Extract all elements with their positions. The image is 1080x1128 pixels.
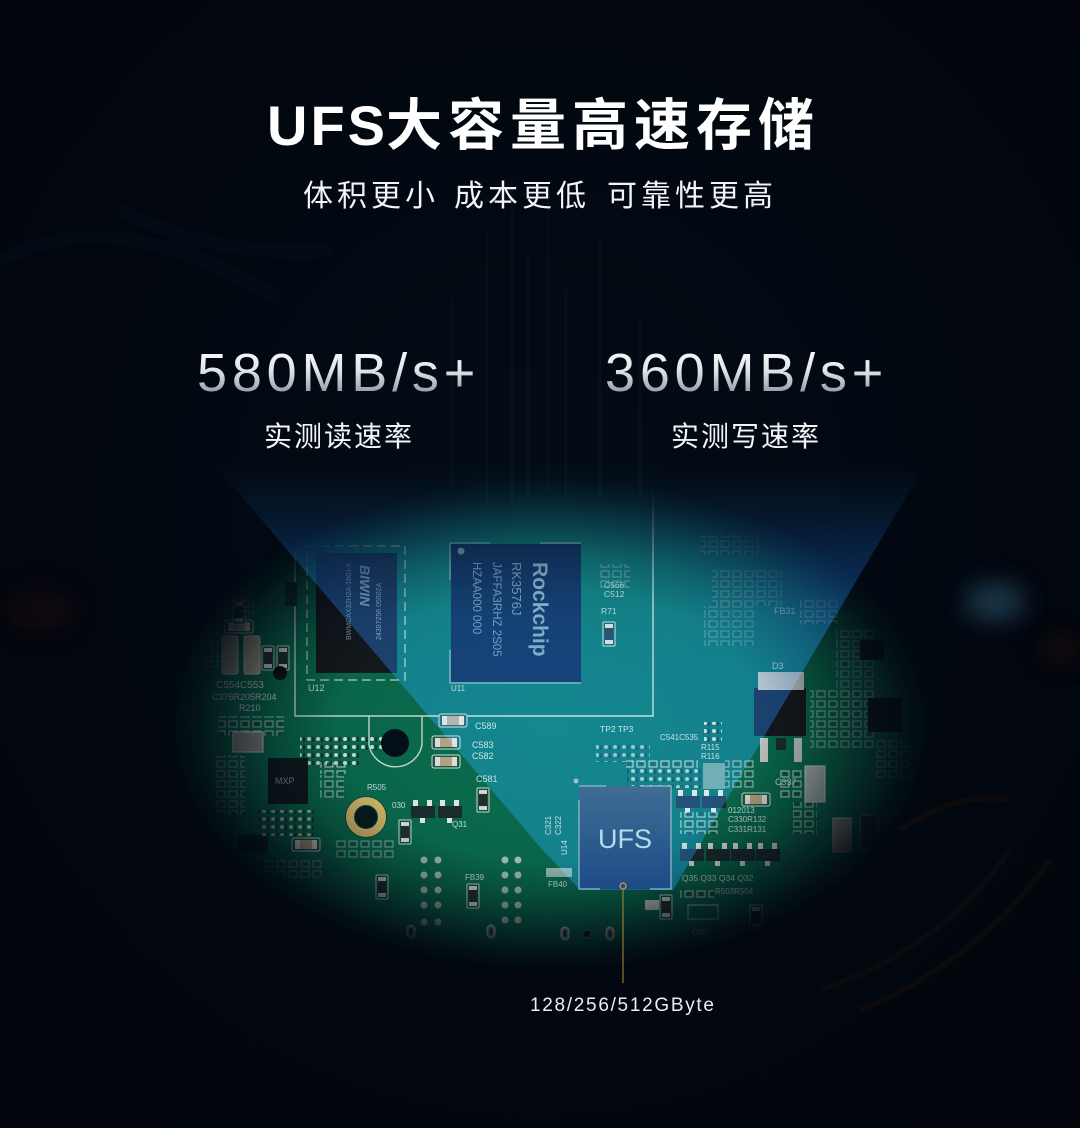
metric: read speed: 实测读速率 xyxy=(264,421,414,452)
regulator D3 xyxy=(754,672,806,762)
memory chip U12: U12 xyxy=(308,683,325,693)
circuit board photograph xyxy=(188,494,912,958)
metric: read speed: 580MB/s+ xyxy=(197,343,480,403)
left board components: C554C553 xyxy=(216,680,264,691)
lower board components: C321 xyxy=(544,815,553,835)
lower board components: U14 xyxy=(560,840,569,855)
main processor: JAFFA3RHZ 2S05 xyxy=(490,562,502,657)
lower board components xyxy=(367,783,614,940)
right board components: C330R132 xyxy=(728,815,767,824)
lower board components: 030 xyxy=(392,801,406,810)
memory chip U12 xyxy=(307,546,405,693)
blue light beam overlay xyxy=(215,465,925,890)
main processor: HZAA000 000 xyxy=(470,562,482,634)
upper components: C566 xyxy=(604,580,625,590)
lower board components: FB40 xyxy=(548,880,568,889)
capacitors C589 C583 C582: C589 xyxy=(475,721,497,731)
memory chip U12: BWMCAX32H2A-16GI-X xyxy=(346,562,353,640)
metric: read speed xyxy=(197,343,480,452)
callout: capacity: 128/256/512GByte xyxy=(530,995,716,1016)
right board components: R116 xyxy=(701,752,720,761)
gold ring mounting hole xyxy=(345,796,387,838)
right board components: Q29 xyxy=(692,928,708,937)
metric: write speed: 实测写速率 xyxy=(671,421,821,452)
infographic canvas xyxy=(13,96,1072,1015)
title: UFS xyxy=(267,94,388,157)
right board components: C331R131 xyxy=(728,825,767,834)
lower board components: C322 xyxy=(554,815,563,835)
UFS chip: UFS xyxy=(598,824,652,854)
capacitors C589 C583 C582: C582 xyxy=(472,751,494,761)
left board components: C376R205R204 xyxy=(212,692,277,702)
subtitle: 体积更小 xyxy=(303,180,439,213)
upper components: D3 xyxy=(772,661,784,671)
right board components: Q35 Q33 Q34 Q32 xyxy=(682,873,754,883)
lower board components: FB39 xyxy=(465,873,485,882)
main processor: Rockchip xyxy=(528,562,551,657)
metric: write speed xyxy=(605,343,888,452)
right board components xyxy=(596,628,911,942)
subtitle: 成本更低 xyxy=(454,180,590,213)
right board components: 012013 xyxy=(728,806,755,815)
upper components: C512 xyxy=(604,589,625,599)
capacitors C589 C583 C582: C583 xyxy=(472,740,494,750)
subtitle: 可靠性更高 xyxy=(607,180,777,213)
upper components: FB31 xyxy=(774,606,796,616)
main processor: RK3576J xyxy=(509,562,524,615)
silk outline around processor xyxy=(295,480,653,716)
left board components: R210 xyxy=(239,703,261,713)
UFS chip xyxy=(574,778,671,889)
lower board components: Q31 xyxy=(452,820,468,829)
memory chip U12: BIWIN xyxy=(357,565,373,607)
main processor: U11 xyxy=(451,684,466,693)
main processor xyxy=(450,543,581,693)
upper components: R71 xyxy=(601,606,617,616)
callout line and marker xyxy=(620,883,626,983)
right board components: C617 xyxy=(722,933,742,942)
capacitors C589 C583 C582 xyxy=(432,714,498,784)
metric: write speed: 360MB/s+ xyxy=(605,343,888,403)
title: 大容量高速存储 xyxy=(386,94,820,157)
capacitors C589 C583 C582: C581 xyxy=(476,774,498,784)
mounting hole xyxy=(369,716,422,767)
left board components: MXP xyxy=(275,776,295,786)
right board components: C541C535 xyxy=(660,733,699,742)
memory chip U12: 24307256 05502A xyxy=(376,582,383,640)
left board components xyxy=(204,582,394,878)
right board components: R115 xyxy=(701,743,720,752)
right board components: TP2 TP3 xyxy=(600,724,634,734)
lower board components: R505 xyxy=(367,783,387,792)
upper components xyxy=(600,535,838,671)
right board components: C337 xyxy=(775,777,797,787)
right board components: R503R504 xyxy=(715,887,754,896)
